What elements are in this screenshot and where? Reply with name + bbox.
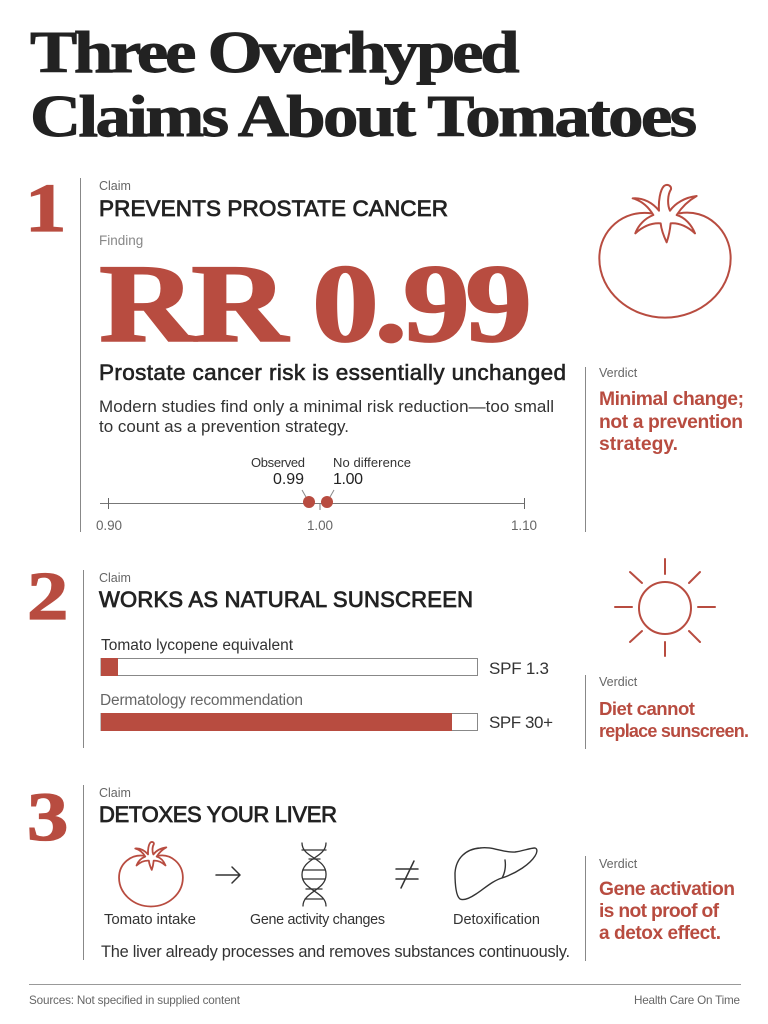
verdict 1: not a prevention <box>599 412 743 433</box>
claim heading 3: DETOXES YOUR LIVER <box>99 802 337 827</box>
icon: liver <box>455 848 537 900</box>
not equal symbol <box>396 861 418 888</box>
claim label 1: Claim <box>99 179 131 193</box>
bar: dermatology recommendation: SPF 30+ <box>489 713 553 732</box>
footer: Health Care On Time <box>634 994 740 1007</box>
verdict 1: Minimal change; <box>599 389 744 410</box>
icon: dna <box>302 843 326 906</box>
verdict 1 <box>586 366 744 532</box>
claim heading 1: PREVENTS PROSTATE CANCER <box>99 196 448 221</box>
claim heading 2: WORKS AS NATURAL SUNSCREEN <box>99 587 473 612</box>
number 1: 1 <box>25 170 66 246</box>
risk ratio scale chart: 1.00 <box>333 471 363 488</box>
label: tomato intake: Tomato intake <box>104 911 196 928</box>
verdict 2 <box>586 675 749 749</box>
panel: claim 3 <box>27 779 735 961</box>
liver note: The liver already processes and removes substances continuously. <box>101 943 570 961</box>
risk ratio scale chart <box>96 455 537 533</box>
footer: Sources: Not specified in supplied content <box>29 994 241 1007</box>
risk ratio scale chart: Observed <box>251 455 305 470</box>
risk ratio scale chart: 1.00 <box>307 518 333 533</box>
bar: dermatology recommendation <box>100 692 553 732</box>
panel: claim 1 <box>25 170 744 533</box>
verdict 1: strategy. <box>599 434 678 455</box>
risk ratio scale chart: 1.10 <box>511 518 537 533</box>
claim label 2: Claim <box>99 571 131 585</box>
finding explanation <box>99 397 554 436</box>
verdict 2: Diet cannot <box>599 698 695 719</box>
verdict 3: is not proof of <box>599 901 720 922</box>
finding label: Finding <box>99 233 143 248</box>
finding explanation: to count as a prevention strategy. <box>99 417 349 436</box>
risk ratio scale chart: No difference <box>333 455 411 470</box>
bar: tomato lycopene <box>101 637 549 678</box>
bar: tomato lycopene: Tomato lycopene equivalent <box>101 637 294 654</box>
big statistic: RR 0.99 <box>99 241 532 365</box>
bar: dermatology recommendation: Dermatology recommendation <box>100 692 303 709</box>
title <box>30 20 697 150</box>
icon: small tomato <box>119 842 183 906</box>
verdict 2: replace sunscreen. <box>599 721 749 741</box>
icon: tomato <box>599 185 731 318</box>
arrow <box>216 867 240 883</box>
claim label 3: Claim <box>99 786 131 800</box>
verdict 1: Verdict <box>599 366 638 380</box>
verdict 2: Verdict <box>599 675 638 689</box>
risk ratio scale chart: 0.99 <box>273 471 304 488</box>
number 2: 2 <box>27 558 68 634</box>
verdict 3: a detox effect. <box>599 923 721 944</box>
label: gene activity: Gene activity changes <box>250 912 385 928</box>
risk ratio scale chart: 0.90 <box>96 518 122 533</box>
verdict 3: Verdict <box>599 857 638 871</box>
finding headline: Prostate cancer risk is essentially unchanged <box>99 360 566 385</box>
verdict 3 <box>586 856 735 961</box>
label: detoxification: Detoxification <box>453 912 540 928</box>
title: Three Overhyped <box>30 20 520 86</box>
panel: claim 2 <box>27 558 749 749</box>
finding explanation: Modern studies find only a minimal risk reduction—too small <box>99 397 554 416</box>
number 3: 3 <box>27 779 68 855</box>
footer <box>29 984 741 1007</box>
title: Claims About Tomatoes <box>30 84 697 150</box>
icon: sun <box>615 559 715 656</box>
bar: tomato lycopene: SPF 1.3 <box>489 659 549 678</box>
verdict 3: Gene activation <box>599 879 735 900</box>
